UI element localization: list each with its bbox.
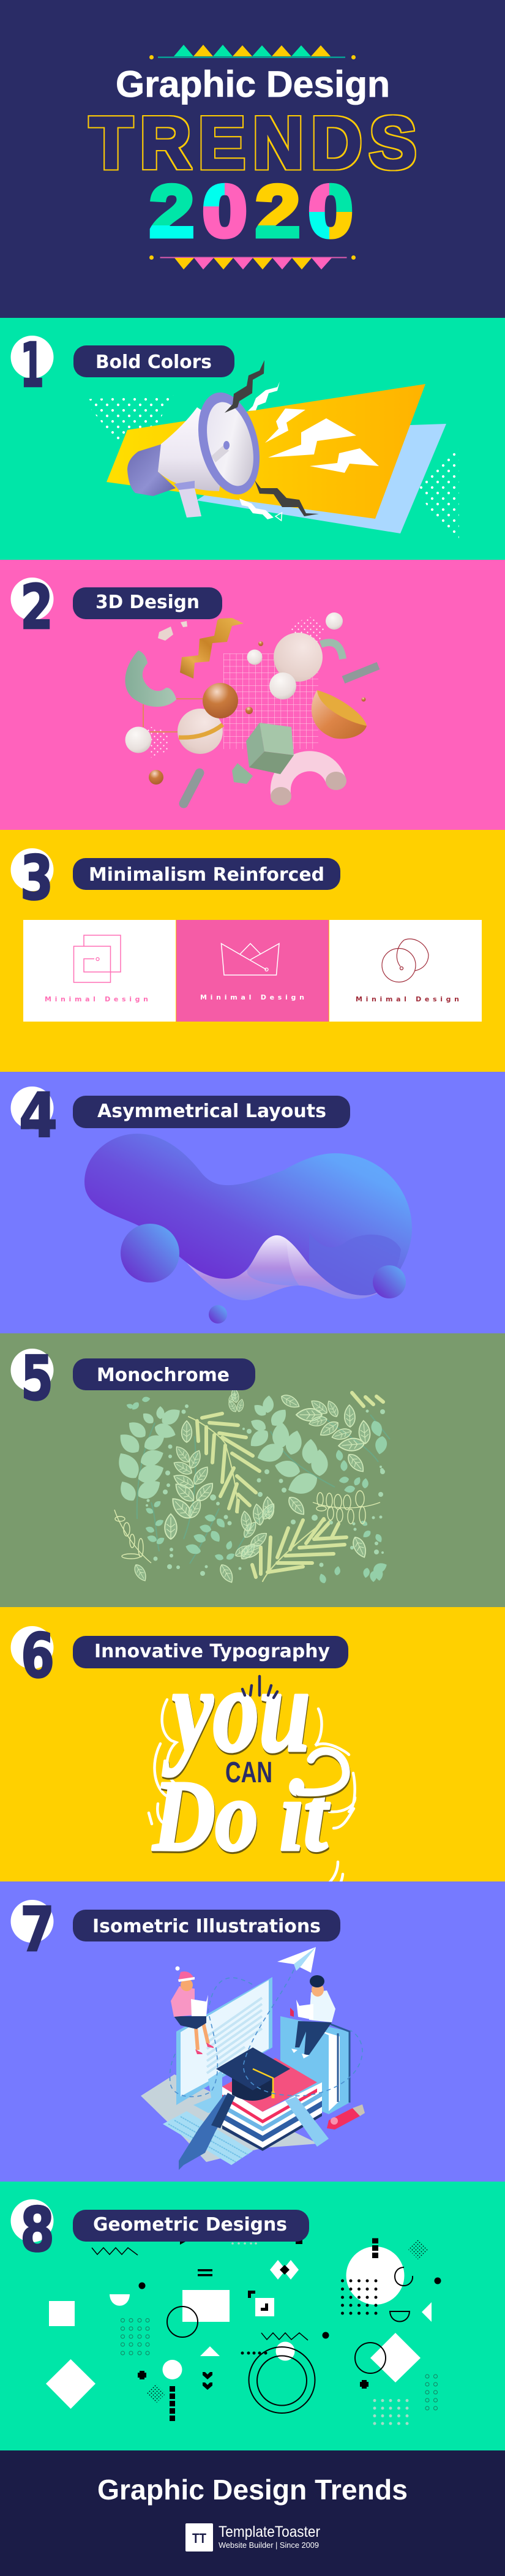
panel: 2 3D design xyxy=(0,560,505,830)
lettering: CAN: CAN xyxy=(225,1757,272,1789)
pill heading: Isometric Illustrations: Isometric Illustrations xyxy=(92,1916,321,1937)
pill heading: Asymmetrical Layouts: Asymmetrical Layouts xyxy=(97,1101,326,1122)
number badge 2 xyxy=(11,571,54,643)
big pale leaves xyxy=(113,1395,328,1504)
logo: TemplateToaster xyxy=(185,2523,320,2552)
card: squares logo: Minimal Design xyxy=(45,995,148,1003)
panel: 5 monochrome xyxy=(0,1333,505,1607)
illustration: 3D shapes xyxy=(125,612,378,805)
person left xyxy=(171,1966,214,2054)
lettering: you: you xyxy=(163,1644,310,1777)
panel: 6 innovative typography xyxy=(0,1607,505,1897)
card: squares logo xyxy=(23,920,176,1022)
pill heading: Isometric Illustrations xyxy=(73,1910,340,1941)
illustration: isometric study scene xyxy=(141,1947,365,2170)
person right xyxy=(290,1975,335,2058)
logo: TemplateToaster: TT xyxy=(192,2531,206,2546)
number badge 3: 3 xyxy=(20,842,53,914)
usb drive xyxy=(327,2108,360,2130)
pill heading: Monochrome: Monochrome xyxy=(97,1365,230,1386)
illustration: lettering xyxy=(149,1644,355,1897)
panel: footer xyxy=(0,2450,505,2576)
small sage leaves xyxy=(125,1396,389,1584)
footer title: Graphic Design Trends xyxy=(97,2474,408,2506)
pill heading: Bold Colors: Bold Colors xyxy=(95,352,212,373)
illustration: botanical leaves xyxy=(113,1387,390,1585)
panel: 7 isometric illustrations xyxy=(0,1881,505,2182)
number badge 4: 4 xyxy=(19,1080,58,1151)
keyboard xyxy=(163,2111,253,2165)
pill heading: Minimalism Reinforced xyxy=(73,858,340,890)
stems xyxy=(137,1415,390,1564)
top bunting xyxy=(149,45,356,59)
card: crown logo xyxy=(176,920,329,1022)
number badge 3 xyxy=(11,842,54,914)
logo: TemplateToaster: TemplateToaster xyxy=(219,2523,320,2540)
pill heading: Monochrome xyxy=(73,1358,255,1390)
logo: TemplateToaster: Website Builder | Since 2009 xyxy=(219,2540,319,2550)
illustration: megaphone xyxy=(83,360,459,542)
pill heading: Geometric Designs: Geometric Designs xyxy=(93,2214,287,2235)
card: circles logo xyxy=(329,920,482,1022)
pill heading: 3D Design: 3D Design xyxy=(95,592,200,613)
title: 2020 multicolour: 2020 xyxy=(149,170,361,252)
number badge 5: 5 xyxy=(21,1343,53,1414)
number badge 8: 8 xyxy=(20,2194,54,2265)
number badge 2: 2 xyxy=(20,571,53,643)
standing book xyxy=(280,2016,350,2114)
book stack xyxy=(222,2082,322,2148)
fronds xyxy=(189,1393,383,1581)
monitor xyxy=(176,1977,272,2105)
number badge 1 xyxy=(11,330,54,401)
lettering: Do it: Do it xyxy=(152,1760,330,1872)
pen xyxy=(179,2095,235,2170)
number badge 7: 7 xyxy=(20,1894,54,1965)
veined outline leaves xyxy=(132,1387,371,1585)
pill heading: Innovative Typography: Innovative Typography xyxy=(94,1641,330,1662)
dashed paths xyxy=(170,1970,362,2096)
pill heading: Geometric Designs xyxy=(73,2210,309,2242)
pill heading: Minimalism Reinforced: Minimalism Reinforced xyxy=(89,864,324,886)
dots xyxy=(146,1404,385,1576)
number badge 6: 6 xyxy=(21,1620,54,1692)
t-loop flourish xyxy=(299,1751,346,1793)
illustration: geometric shapes xyxy=(46,2237,441,2425)
panel: 1 bold colors xyxy=(0,318,505,560)
radiating rays xyxy=(242,1676,277,1698)
title: Graphic Design: Graphic Design xyxy=(116,64,390,105)
number badge 5 xyxy=(11,1343,54,1414)
illustration: fluid blob xyxy=(84,1134,412,1324)
paper plane xyxy=(277,1947,316,1973)
panel: header xyxy=(0,0,505,318)
outline sprig right xyxy=(114,1491,380,1563)
number badge 1: 1 xyxy=(20,330,44,401)
number badge 7 xyxy=(11,1894,54,1965)
card: crown logo: Minimal Design xyxy=(200,993,304,1001)
number badge 6 xyxy=(11,1620,54,1692)
panel: 4 asymmetrical layouts xyxy=(0,1072,505,1333)
pill heading: Asymmetrical Layouts xyxy=(73,1096,350,1128)
title: TRENDS outline: TRENDS xyxy=(89,102,424,184)
panel: 3 minimalism xyxy=(0,830,505,1072)
number badge 8 xyxy=(11,2194,54,2265)
grad cap xyxy=(232,2078,272,2101)
pill heading: 3D Design xyxy=(73,587,222,619)
pill heading: Bold Colors xyxy=(73,345,234,377)
card: circles logo: Minimal Design xyxy=(356,995,459,1003)
panel: 8 geometric designs xyxy=(0,2182,505,2450)
pill heading: Innovative Typography xyxy=(73,1636,348,1668)
bottom bunting xyxy=(149,255,356,269)
stairs xyxy=(285,2096,329,2147)
